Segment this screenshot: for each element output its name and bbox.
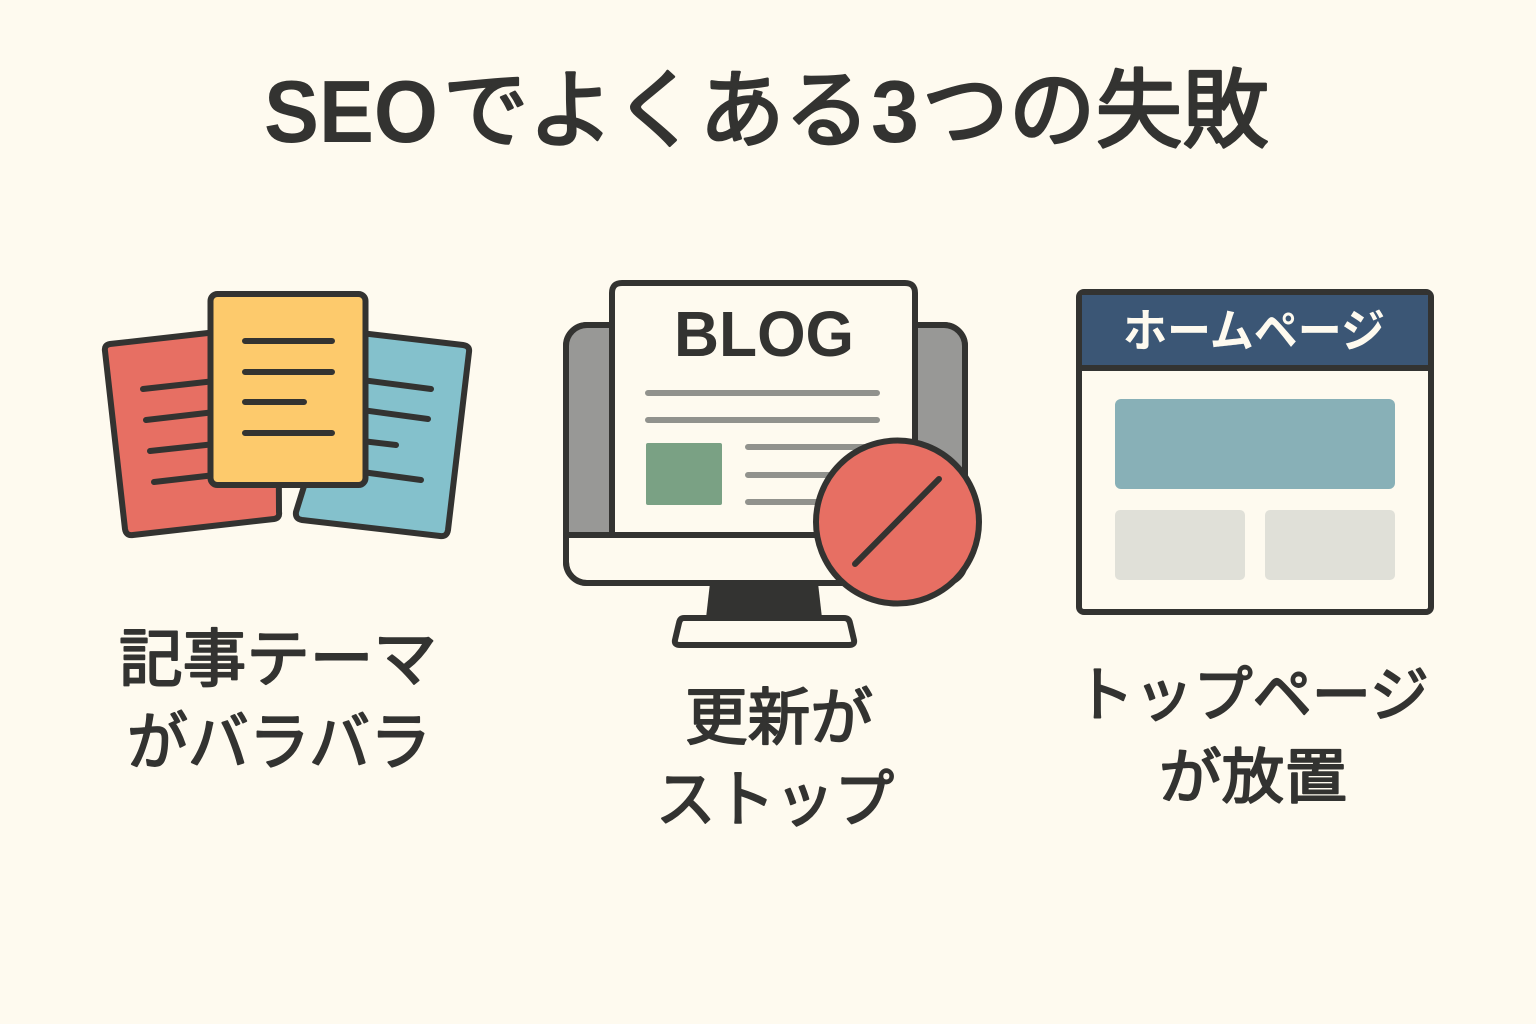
caption: neglected top page: トップページ: [1075, 662, 1429, 729]
prohibited badge: [816, 440, 979, 604]
monitor stand: [675, 583, 854, 645]
left content block: [1115, 510, 1245, 580]
red document: [105, 326, 279, 535]
caption: neglected top page: [1075, 662, 1429, 811]
title: でよくある: [443, 63, 870, 159]
yellow document: [210, 294, 366, 485]
window header: [1079, 295, 1431, 368]
caption: updates stopped: 更新が: [685, 684, 873, 753]
title: 3: [871, 62, 919, 161]
monitor body: [566, 325, 965, 583]
icon: scattered documents: [105, 294, 469, 536]
title: [264, 62, 1269, 161]
caption: neglected top page: が放置: [1159, 744, 1347, 811]
blog heading: BLOG: [674, 298, 854, 370]
icon: homepage window: [1079, 292, 1431, 612]
right content block: [1265, 510, 1395, 580]
caption: scattered themes: [119, 625, 437, 778]
icon: monitor with stopped blog: [566, 283, 979, 645]
caption: updates stopped: ストップ: [656, 766, 894, 835]
window header: ホームページ: [1123, 305, 1385, 357]
caption: scattered themes: がバラバラ: [127, 708, 431, 778]
blog page: [612, 283, 915, 535]
caption: updates stopped: [656, 684, 894, 835]
blue document: [296, 332, 469, 536]
window frame: [1079, 292, 1431, 612]
title: SEO: [264, 62, 438, 161]
hero block: [1115, 399, 1395, 489]
caption: scattered themes: 記事テーマ: [119, 625, 437, 695]
title: つの失敗: [922, 63, 1269, 159]
